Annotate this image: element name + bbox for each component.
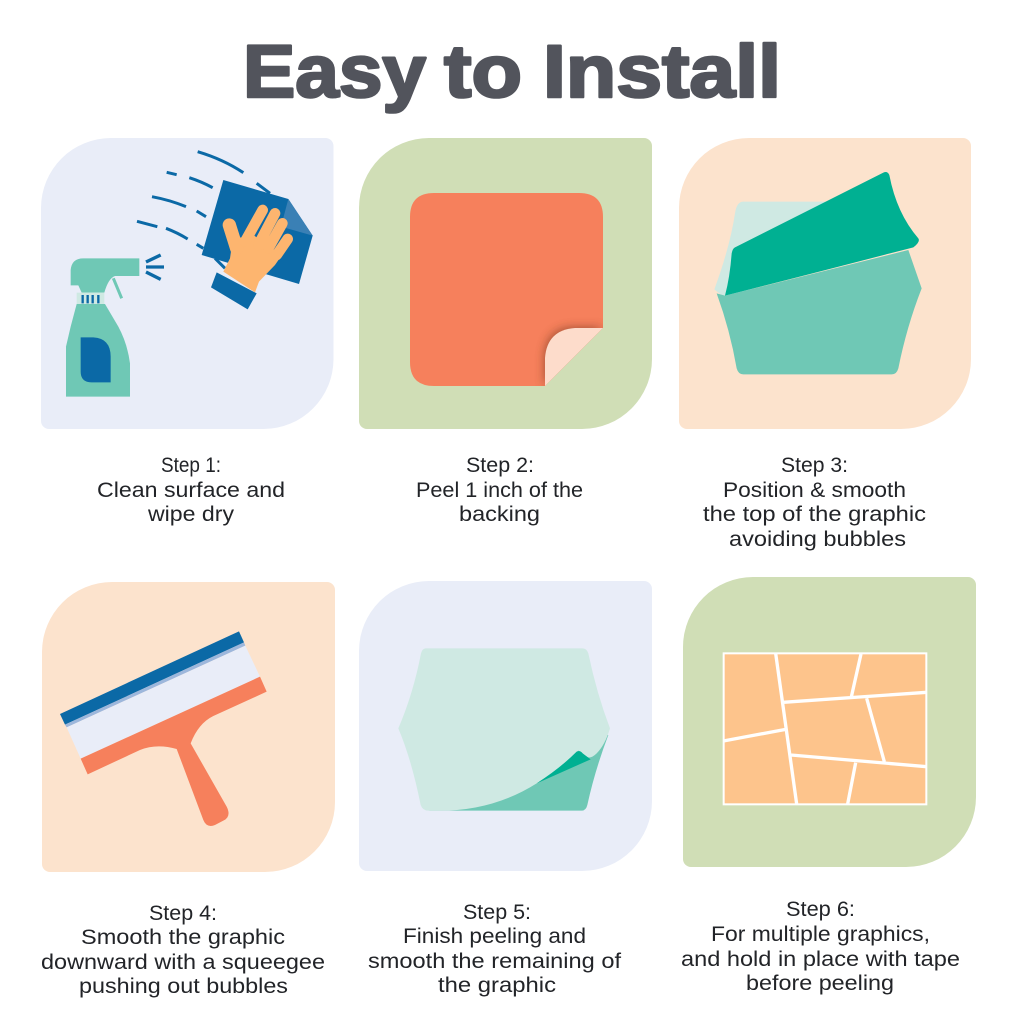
icon: motion dashes <box>137 152 270 268</box>
step 5 caption: Step 5: <box>463 901 531 924</box>
step 3 caption: Step 3: <box>781 454 848 477</box>
step 5 caption <box>368 901 621 997</box>
step 5 caption: Finish peeling and <box>403 925 586 948</box>
step 4 caption: downward with a squeegee <box>41 951 325 974</box>
step 4 caption <box>41 902 325 998</box>
step 3 caption: avoiding bubbles <box>729 528 906 551</box>
step 2 caption: backing <box>459 503 540 526</box>
icon: squeegee <box>60 631 267 826</box>
panel: step 2 peel backing <box>359 138 652 429</box>
step 4 caption: Step 4: <box>149 902 217 925</box>
panel background 2 <box>359 138 652 429</box>
step 2 caption: Peel 1 inch of the <box>416 479 583 502</box>
icon: tiled graphics layout <box>723 653 927 804</box>
step 5 caption: the graphic <box>438 974 556 997</box>
step 5 caption: smooth the remaining of <box>368 950 621 973</box>
panel background 6 <box>683 577 976 867</box>
step 1 caption: wipe dry <box>147 503 235 526</box>
panel background 3 <box>679 138 971 429</box>
step 2 caption: Step 2: <box>466 454 534 477</box>
panel background 4 <box>42 582 335 872</box>
title: Easy <box>243 30 426 113</box>
step 6 caption <box>681 898 960 995</box>
panel background 5 <box>359 581 652 871</box>
panel: step 5 finish peeling <box>359 581 652 871</box>
icon: orange sticker <box>410 193 603 386</box>
peel shadow <box>545 328 603 386</box>
panel: step 6 multiple graphics <box>683 577 976 867</box>
title: Install <box>543 30 781 113</box>
panel: step 4 squeegee <box>42 582 335 872</box>
step 1 caption: Clean surface and <box>97 479 285 502</box>
step 6 caption: and hold in place with tape <box>681 948 960 971</box>
icon: cloth and hand <box>202 180 313 309</box>
step 4 caption: Smooth the graphic <box>81 926 285 949</box>
panel: step 3 position graphic <box>679 138 971 429</box>
icon: graphic with backing peeled <box>398 648 610 811</box>
title: to <box>444 30 522 113</box>
step 4 caption: pushing out bubbles <box>79 975 288 998</box>
step 3 caption: the top of the graphic <box>703 503 926 526</box>
panel: step 1 clean surface <box>41 138 334 429</box>
step 6 caption: before peeling <box>746 972 894 995</box>
step 1 caption <box>97 454 285 526</box>
step 6 caption: Step 6: <box>786 898 855 921</box>
panel background 1 <box>41 138 334 429</box>
step 2 caption <box>416 454 583 526</box>
step 3 caption: Position & smooth <box>723 479 906 502</box>
icon: spray bottle <box>66 255 164 397</box>
icon: peeled corner <box>545 328 603 386</box>
icon: graphic being positioned <box>714 172 922 374</box>
step 1 caption: Step 1: <box>161 454 221 477</box>
step 3 caption <box>703 454 926 551</box>
step 6 caption: For multiple graphics, <box>711 923 930 946</box>
